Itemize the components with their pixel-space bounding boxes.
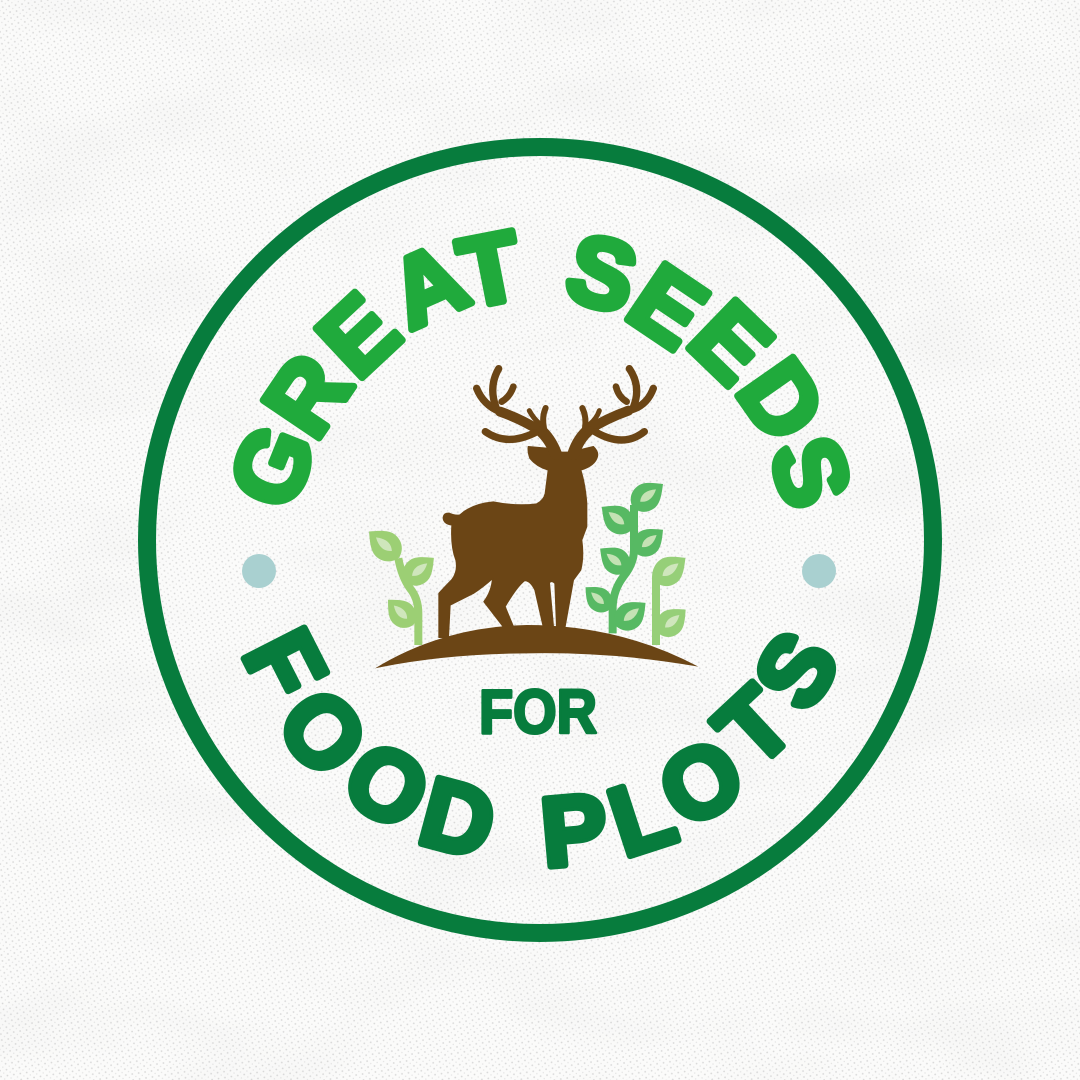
heading: FOOD PLOTS: T [695, 665, 813, 787]
heading: FOOD PLOTS: O [256, 667, 390, 797]
heading: GREAT SEEDS: E [297, 272, 419, 398]
heading: GREAT SEEDS: R [242, 335, 372, 455]
heading: FOOD PLOTS: F [222, 612, 348, 716]
illustration: deer on hill with plants [360, 369, 698, 668]
left plant [360, 520, 442, 645]
dot left [242, 554, 276, 588]
middle plant [578, 473, 671, 637]
heading: GREAT SEEDS: G [207, 410, 337, 522]
right plant [646, 547, 694, 645]
heading: GREAT SEEDS: E [669, 280, 793, 404]
heading: GREAT SEEDS: S [556, 211, 648, 335]
heading: GREAT SEEDS: T [450, 209, 530, 329]
badge ring [147, 147, 933, 933]
heading: GREAT SEEDS: E [610, 242, 726, 370]
heading: FOOD PLOTS: D [410, 756, 506, 880]
heading: FOOD PLOTS: O [640, 715, 762, 849]
heading: GREAT SEEDS: D [717, 339, 847, 461]
heading: GREAT SEEDS [207, 209, 873, 522]
heading: FOOD PLOTS: S [732, 613, 860, 727]
heading: GREAT SEEDS: S [749, 424, 873, 520]
heading: FOOD PLOTS [222, 612, 860, 888]
heading: GREAT SEEDS: A [373, 220, 483, 350]
hill [375, 625, 698, 668]
dot right [802, 554, 836, 588]
heading: FOOD PLOTS: P [537, 772, 611, 888]
label: FOR: FOR [479, 678, 597, 747]
heading: FOOD PLOTS: O [326, 718, 448, 852]
heading: FOOD PLOTS: L [597, 754, 687, 878]
deer silhouette [439, 369, 653, 637]
